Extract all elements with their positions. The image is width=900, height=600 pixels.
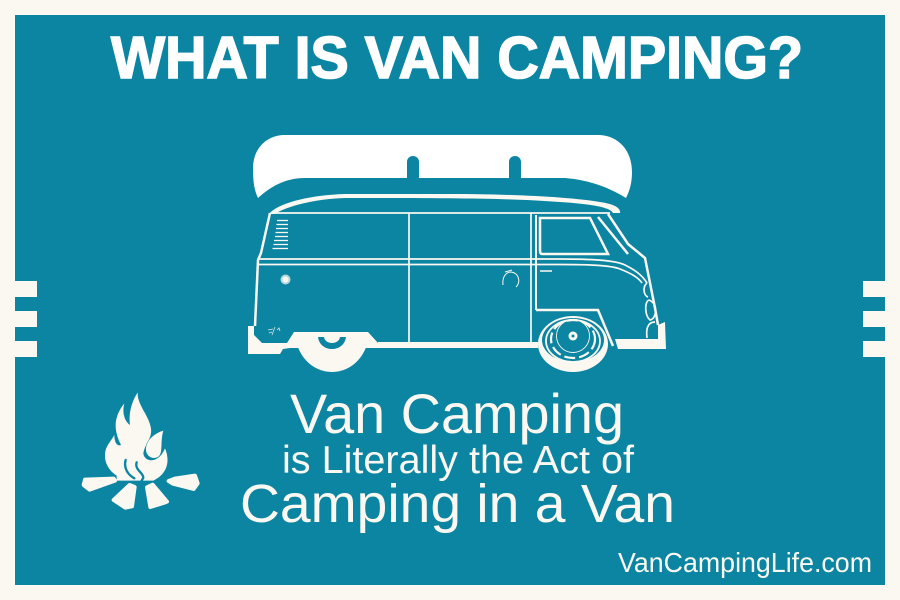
sill: [378, 342, 538, 348]
rear bumper and arch: [248, 326, 381, 354]
right edge tabs: [863, 281, 885, 357]
log left: [84, 479, 115, 490]
side vent: [272, 220, 288, 248]
rear badge: [268, 327, 280, 335]
log centre left: [114, 485, 135, 508]
headline line 3: Camping in a Van: [240, 474, 675, 534]
tail light: [282, 276, 290, 284]
rear hub: [318, 337, 346, 349]
van roof: [269, 194, 620, 214]
headline line 2: is Literally the Act of: [282, 439, 634, 482]
van body outlines: [255, 213, 658, 346]
left edge tabs: [15, 281, 37, 357]
front wheel: [538, 316, 608, 372]
canoe: [253, 135, 632, 198]
title: WHAT IS VAN CAMPING?: [111, 25, 803, 91]
flame inner wisps: [125, 460, 143, 484]
rear wheel: [295, 333, 369, 372]
icon: van with canoe on roof: [248, 135, 666, 372]
flames: [105, 392, 168, 481]
log centre right: [147, 485, 167, 507]
website url: VanCampingLife.com: [618, 547, 872, 578]
icon: campfire: [84, 392, 198, 508]
flame tongue: [146, 431, 163, 458]
headline line 1: Van Camping: [290, 382, 624, 445]
front bumper: [615, 322, 666, 349]
log right: [169, 476, 198, 489]
